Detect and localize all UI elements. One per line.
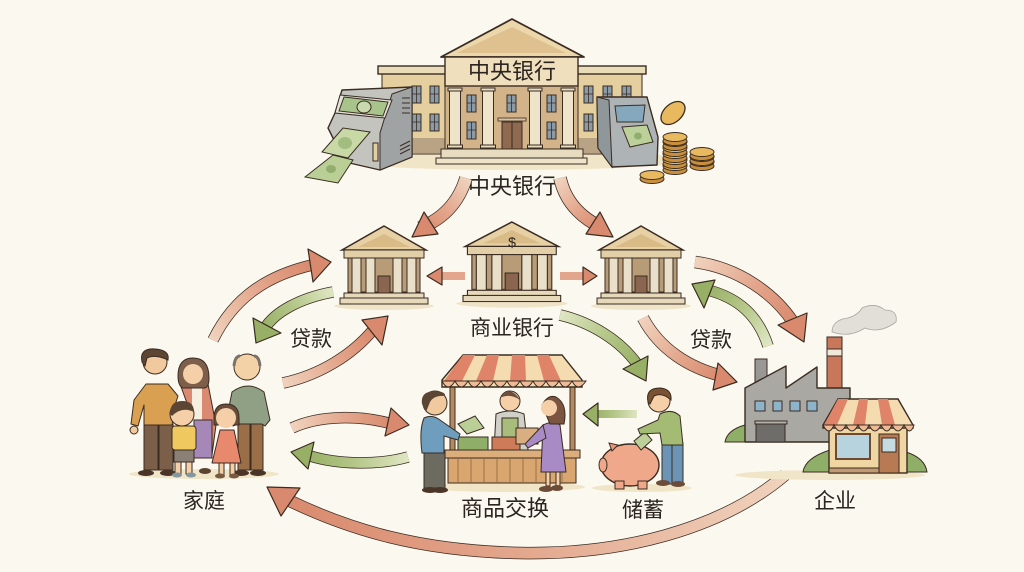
father (130, 349, 178, 476)
icon: center commercial bank (456, 222, 567, 308)
arrow: households to left bank lower (283, 316, 388, 383)
label: loan left: 贷款 (290, 328, 332, 351)
icon: center commercial bank: $ (508, 234, 516, 250)
seller (494, 391, 528, 450)
heading: building sign: 中央银行 (468, 59, 556, 84)
arrow: center to left bank (427, 267, 465, 285)
label: loan right: 贷款 (690, 329, 732, 352)
illustration: man with piggy bank (592, 388, 692, 492)
arrow: right bank lower to enterprise (643, 318, 737, 390)
shop (829, 425, 907, 473)
arrow: households to market (292, 408, 409, 436)
girl (212, 404, 241, 478)
arrow: market to households (291, 442, 408, 469)
arrow: commercial bank to savings (560, 315, 648, 381)
icon: left commercial bank (334, 226, 434, 310)
money note (458, 416, 484, 434)
icon: money printing machine (305, 87, 412, 183)
customer woman (525, 396, 566, 492)
arrow: center to right bank (560, 267, 597, 285)
arrow: enterprise to households, large (267, 475, 785, 553)
icon: gold coins (640, 97, 714, 184)
label: exchange of goods: 商品交换 (461, 496, 549, 521)
label: households: 家庭 (183, 490, 225, 513)
mother (178, 358, 216, 474)
arrow: right bank to enterprise (695, 262, 807, 342)
factory body (745, 366, 850, 442)
arrow: central bank to right commercial bank (560, 178, 613, 237)
label: commercial bank: 商业银行 (470, 317, 554, 340)
arrow: loan from left bank to households (253, 292, 333, 343)
grandfather (228, 354, 270, 476)
customer man (421, 391, 460, 493)
smoke (832, 305, 896, 334)
arrow: enterprise to right bank (692, 280, 768, 346)
boy (170, 401, 196, 478)
illustration: market stall (421, 355, 586, 493)
label: central bank: 中央银行 (468, 174, 556, 199)
arrow: central bank to left commercial bank (412, 178, 466, 237)
arrow: households deposit to left bank (213, 249, 331, 340)
bushes (803, 450, 830, 472)
icon: right commercial bank (591, 226, 691, 310)
illustration: central bank building (342, 19, 682, 170)
illustration: factory and shop (725, 305, 927, 480)
piggy bank (599, 443, 659, 489)
label: enterprises: 企业 (814, 490, 856, 513)
arrow: savings to market (583, 403, 637, 426)
icon: ATM (597, 97, 658, 167)
illustration: family (129, 349, 279, 479)
bush (725, 425, 745, 442)
label: savings: 储蓄 (622, 499, 664, 522)
